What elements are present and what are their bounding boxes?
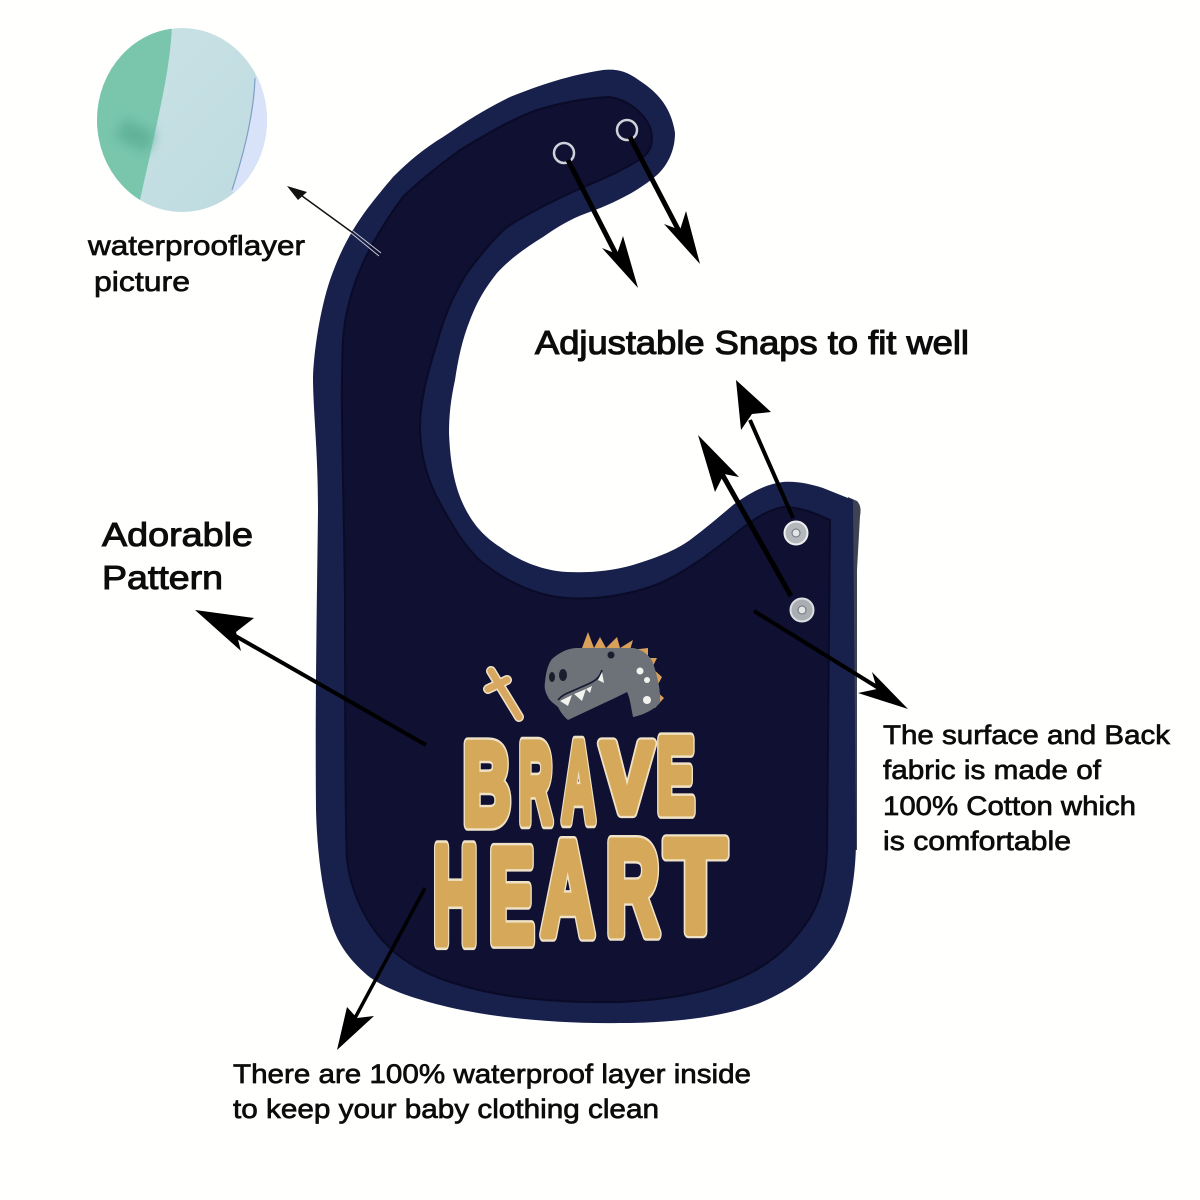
dino spikes (582, 632, 664, 708)
heading: adorable pattern (102, 516, 253, 596)
title: HEART printed on bib: R (606, 813, 659, 962)
label: waterprooflayer picture: picture (94, 266, 190, 297)
title: BRAVE printed on bib: R (519, 721, 552, 847)
label: waterprooflayer picture: waterprooflayer (87, 230, 305, 261)
dino head (545, 648, 660, 720)
title: HEART printed on bib (433, 811, 726, 973)
title: BRAVE printed on bib: A (562, 720, 595, 846)
title: HEART printed on bib: E (489, 821, 534, 971)
text: fabric note (883, 720, 1171, 856)
arrow: from top snap left (568, 160, 638, 288)
title: BRAVE printed on bib (463, 716, 694, 849)
icon: top snap holes (554, 120, 637, 163)
bib outer binding (313, 70, 856, 1023)
title: HEART printed on bib: T (665, 811, 726, 960)
title: BRAVE printed on bib: E (657, 716, 694, 835)
title: HEART printed on bib: E (489, 821, 534, 971)
title: HEART printed on bib: H (433, 818, 478, 973)
panel: navy bib (313, 70, 861, 1023)
arrow: to fabric note (754, 611, 908, 709)
text: waterproof note: There are 100% waterproof layer inside (233, 1059, 751, 1089)
arrow: to waterproof sample (287, 186, 381, 256)
icon: waterproof layer sample circle (97, 28, 267, 212)
icon: sword (488, 671, 519, 717)
heading: adorable pattern: Pattern (102, 559, 223, 596)
title: BRAVE printed on bib: E (657, 716, 694, 835)
title: BRAVE printed on bib: R (519, 721, 552, 847)
text: waterproof note: to keep your baby clothing clean (233, 1094, 659, 1124)
title: BRAVE printed on bib: V (601, 722, 653, 833)
dino eyes and dots (549, 672, 555, 682)
title: HEART printed on bib: H (433, 818, 478, 973)
heading: adorable pattern: Adorable (102, 516, 253, 553)
label: waterprooflayer picture (87, 230, 305, 297)
text: fabric note: is comfortable (883, 826, 1071, 856)
text: waterproof note (233, 1059, 751, 1124)
title: BRAVE printed on bib: A (562, 720, 595, 846)
arrow: from lower press snap (698, 435, 791, 596)
arrow: to adorable pattern (195, 610, 426, 745)
text: fabric note: The surface and Back (883, 720, 1171, 750)
title: BRAVE printed on bib: V (601, 722, 653, 833)
heading: adjustable snaps: Adjustable Snaps to fit well (535, 324, 969, 361)
arrow: from upper press snap (736, 380, 793, 518)
arrow: to waterproof note (337, 888, 425, 1050)
text: fabric note: 100% Cotton which (883, 791, 1136, 821)
text: fabric note: fabric is made of (883, 755, 1102, 785)
arrow: from top snap right (630, 137, 700, 264)
bib inner panel (342, 97, 830, 1002)
title: BRAVE printed on bib: B (463, 720, 511, 849)
bib back edge (848, 497, 861, 850)
title: HEART printed on bib: A (541, 814, 594, 963)
dino mouth and teeth (558, 670, 602, 700)
title: HEART printed on bib: R (606, 813, 659, 962)
title: HEART printed on bib: T (665, 811, 726, 960)
icon: dinosaur head (545, 632, 664, 720)
title: HEART printed on bib: A (541, 814, 594, 963)
icon: press snaps (784, 522, 814, 622)
title: BRAVE printed on bib: B (463, 720, 511, 849)
